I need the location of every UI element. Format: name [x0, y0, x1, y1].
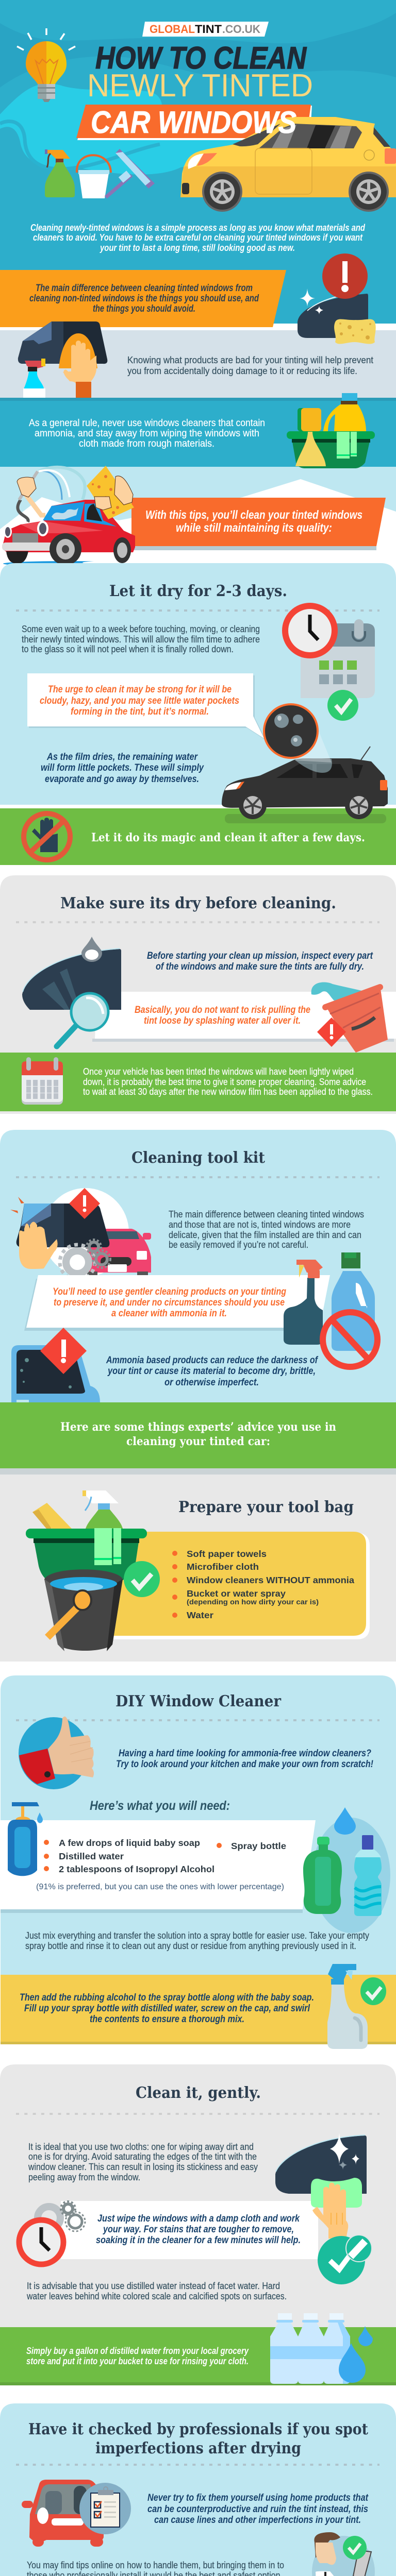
text: film dries: evaporate and go away by themselves.: [45, 773, 199, 785]
icon: squeegee: [106, 149, 155, 197]
band: expert advice: cleaning your tinted car:: [126, 1435, 270, 1448]
callout: main difference: the things you should avoid.: [93, 303, 195, 314]
panel: DIY window cleaner: [1, 1675, 396, 1975]
icon: calendar and clock: [285, 606, 375, 698]
text: main difference: be easily removed if you’re not careful.: [169, 1239, 308, 1250]
panel: clean it gently: [0, 2064, 396, 2327]
text: knowing products: Knowing what products are bad for your tinting will help prevent: [127, 354, 373, 365]
text: knowing products: you from accidentally doing damage to it or reducing its life.: [127, 365, 357, 376]
icon: bottles and drop: [303, 1807, 390, 1933]
title: [76, 41, 313, 140]
heading: DIY Window Cleaner: [116, 1692, 282, 1710]
icon: bucket of tools: [287, 393, 375, 468]
text: film dries: [41, 751, 204, 785]
logo badge: [142, 22, 269, 37]
banner: damp cloth: soaking it in the cleaner for a few minutes will help.: [96, 2234, 301, 2246]
list box: Soft paper towels: [187, 1549, 267, 1559]
heading: Make sure its dry before cleaning.: [60, 894, 336, 912]
list box: [103, 1532, 370, 1639]
icon: window, cloth and hand: [275, 2133, 367, 2239]
banner: gentler products: to preserve it, and under no circumstances should you use: [54, 1297, 285, 1308]
text: main difference: and those that are not is, tinted windows are more: [169, 1219, 351, 1230]
subheading: Here’s what you will need:: [90, 1799, 230, 1813]
banner: basically: Basically, you do not want to risk pulling the: [135, 1004, 310, 1015]
text: ammonia based: your tint or cause its material to become dry, brittle,: [107, 1365, 316, 1377]
text: once your vehicle: [83, 1066, 373, 1097]
band: gallon of distilled water: [0, 2313, 396, 2385]
banner: basically: tint loose by splashing water all over it.: [144, 1015, 301, 1026]
banner: gentler products: a cleaner with ammonia in it.: [111, 1308, 227, 1319]
banner: damp cloth: your way. For stains that are tougher to remove,: [103, 2224, 294, 2235]
icon: magnified water pockets: [264, 704, 318, 758]
ingredients box: (91% is preferred, but you can use the ones with lower percentage): [36, 1883, 284, 1891]
icon: spray bottle with check: [327, 1964, 386, 2049]
panel: prepare your tool bag: [0, 1475, 396, 1662]
icon: bucket: [77, 155, 111, 198]
text: some even wait: [22, 623, 260, 654]
banner: damp cloth: Just wipe the windows with a damp cloth and work: [97, 2213, 300, 2224]
text: some even wait: Some even wait up to a week before touching, moving, or cleaning: [22, 623, 260, 634]
icon: no hand: [24, 814, 70, 860]
heading: Clean it, gently.: [136, 2084, 261, 2102]
intro text: your tint to last a long time, still looking good as new.: [100, 242, 295, 253]
text: film dries: As the film dries, the remaining water: [46, 751, 198, 762]
icon: tool bucket: [26, 1490, 160, 1651]
list box: Window cleaners WITHOUT ammonia: [187, 1575, 354, 1585]
logo badge: GLOBAL: [150, 23, 195, 36]
banner: with this tips: [131, 498, 386, 550]
text: two cloths: [28, 2141, 258, 2182]
panel: cleaning tool kit: [0, 1130, 396, 1402]
text: main difference: [169, 1209, 364, 1250]
callout: urge to clean: The urge to clean it may be strong for it will be: [48, 684, 232, 695]
logo badge: TINT: [195, 23, 222, 36]
text: some even wait: to the glass so it will not peel when it is finally rolled down.: [22, 643, 234, 654]
heading: [28, 2420, 368, 2458]
panel: make sure its dry: [0, 875, 396, 1114]
text: general rule: As a general rule, never use windows cleaners that contain: [29, 418, 265, 429]
panel: tips hero: [0, 467, 396, 572]
list box: Bucket or water spray: [187, 1588, 286, 1599]
icon: teal check: [318, 2235, 372, 2284]
band: add the rubbing alcohol: Then add the rubbing alcohol to the spray bottle along with the baby soap.: [20, 1992, 314, 2003]
callout: main difference: cleaning non-tinted windows is the things you should use, and: [29, 293, 259, 304]
title: HOW TO CLEAN: [95, 41, 307, 75]
band: add the rubbing alcohol: [1, 1964, 396, 2049]
text: ammonia based: Ammonia based products can reduce the darkness of: [106, 1354, 319, 1366]
ingredients box: A few drops of liquid baby soap: [59, 1838, 200, 1848]
text: distilled water advice: water leaves behind white colored scale and calcified spots on surfaces.: [26, 2291, 287, 2301]
ingredients box: Spray bottle: [231, 1841, 286, 1851]
title: NEWLY TINTED: [87, 68, 313, 104]
panel: let it dry: [0, 563, 396, 865]
text: hard time: [116, 1748, 373, 1770]
text: never try: can cause lines and other imperfections in your tint.: [154, 2514, 361, 2526]
text: tips online: You may find tips online on how to handle them, but bringing them in to: [27, 2560, 284, 2570]
panel: light grey band: [0, 324, 396, 401]
icon: red bucket splash: [311, 982, 388, 1053]
band: gallon of distilled water: Simply buy a gallon of distilled water from your local grocery: [26, 2346, 249, 2356]
callout: main difference: The main difference between cleaning tinted windows from: [36, 282, 253, 294]
text: distilled water advice: It is advisable that you use distilled water instead of facet water. Hard: [27, 2280, 280, 2291]
text: two cloths: window cleaner. This can result in losing its stickiness and easy: [28, 2161, 258, 2172]
banner: basically: [92, 992, 396, 1042]
title line: car windows: CAR WINDOWS: [91, 105, 296, 140]
heading: Cleaning tool kit: [131, 1149, 265, 1167]
band: expert advice: Here are some things experts’ advice you use in: [60, 1420, 336, 1434]
icon: clock and gears: [19, 2201, 85, 2264]
icon: clipboard: [79, 2483, 131, 2534]
text: main difference: delicate, given that the film installed are thin and can: [169, 1229, 361, 1240]
icon: man at computer: [312, 2532, 375, 2576]
icon: thumbs up: [19, 1717, 94, 1789]
text: two cloths: one is for drying. Avoid saturating the edges of the tint with the: [28, 2151, 257, 2162]
icon: red car being washed: [2, 466, 135, 569]
icon: green check: [327, 690, 358, 721]
icon: light bulb: [17, 28, 75, 102]
icon: water bottles and drops: [270, 2313, 373, 2384]
band: gallon of distilled water: store and put it into your bucket to use for rinsing your cloth.: [26, 2356, 249, 2366]
text: ammonia based: [106, 1354, 319, 1388]
icon: red car: [22, 2480, 104, 2547]
text: just mix: [25, 1930, 370, 1951]
text: ammonia based: or otherwise imperfect.: [164, 1377, 259, 1388]
callout: urge to clean: [27, 673, 266, 740]
car: dark car: [222, 731, 388, 823]
icon: ammonia bottles crossed out: [284, 1252, 377, 1367]
banner: gentler products: You’ll need to use gentler cleaning products on your tinting: [53, 1286, 286, 1297]
list box: Water: [187, 1610, 213, 1620]
text: knowing products: [127, 354, 373, 376]
text: two cloths: peeling away from the window.: [28, 2172, 140, 2182]
callout: urge to clean: cloudy, hazy, and you may see little water pockets: [40, 695, 239, 706]
text: main difference: The main difference between cleaning tinted windows: [169, 1209, 364, 1219]
ingredients box: [1, 1820, 316, 1913]
icon: window, spray and hand: [18, 321, 107, 398]
icon: soap pump: [8, 1802, 43, 1876]
panel: header: [0, 0, 396, 467]
banner: with this tips: while still maintaining its quality:: [176, 521, 332, 534]
text: never try: [147, 2492, 369, 2526]
heading: imperfections after drying: [95, 2439, 301, 2458]
text: film dries: will form little pockets. These will simply: [41, 762, 204, 773]
text: some even wait: their newly tinted windows. This will allow the film time to adhere: [22, 634, 260, 645]
ingredients box: Distilled water: [59, 1851, 124, 1861]
band: add the rubbing alcohol: Fill up your spray bottle with distilled water, screw on the cap, and swirl: [24, 2003, 310, 2014]
icon: check: [124, 1561, 160, 1597]
band: add the rubbing alcohol: the contents to ensure a thorough mix.: [90, 2013, 244, 2025]
heading: Prepare your tool bag: [178, 1498, 354, 1516]
text: two cloths: It is ideal that you use two cloths: one for wiping away dirt and: [28, 2141, 254, 2152]
list box: (depending on how dirty your car is): [187, 1598, 319, 1606]
icon: window alert: [11, 1328, 100, 1402]
intro text: [30, 222, 366, 253]
icon: spray bottle: [45, 149, 75, 197]
car: yellow hatchback: [180, 117, 396, 212]
panel: have it checked: [0, 2403, 396, 2576]
text: distilled water advice: [26, 2280, 287, 2301]
callout: main difference: [0, 270, 286, 327]
icon: window, hand, car and gears: [10, 1188, 151, 1280]
icon: window with magnifier: [22, 937, 121, 1046]
list box: Microfiber cloth: [187, 1562, 259, 1572]
text: once your vehicle: Once your vehicle has been tinted the windows will have been lightly wiped: [83, 1066, 354, 1077]
text: magic: Let it do its magic and clean it after a few days.: [91, 831, 365, 844]
banner: damp cloth: [61, 2201, 318, 2259]
band: expert advice: [0, 1402, 396, 1475]
text: general rule: cloth made from rough materials.: [79, 438, 214, 449]
ingredients box: 2 tablespoons of Isopropyl Alcohol: [59, 1864, 214, 1874]
text: before starting: [147, 950, 373, 972]
logo badge: .CO.UK: [222, 23, 260, 36]
heading: Let it dry for 2-3 days.: [109, 582, 287, 600]
text: tips online: [27, 2560, 284, 2576]
text: general rule: ammonia, and stay away from wiping the windows with: [35, 428, 259, 439]
text: general rule: [29, 418, 265, 449]
icon: calendar: [22, 1057, 63, 1105]
banner: gentler products: [24, 1275, 330, 1331]
callout: urge to clean: forming in the tint, but it’s normal.: [71, 706, 209, 717]
icon: window, alert and sponge: [298, 253, 376, 344]
